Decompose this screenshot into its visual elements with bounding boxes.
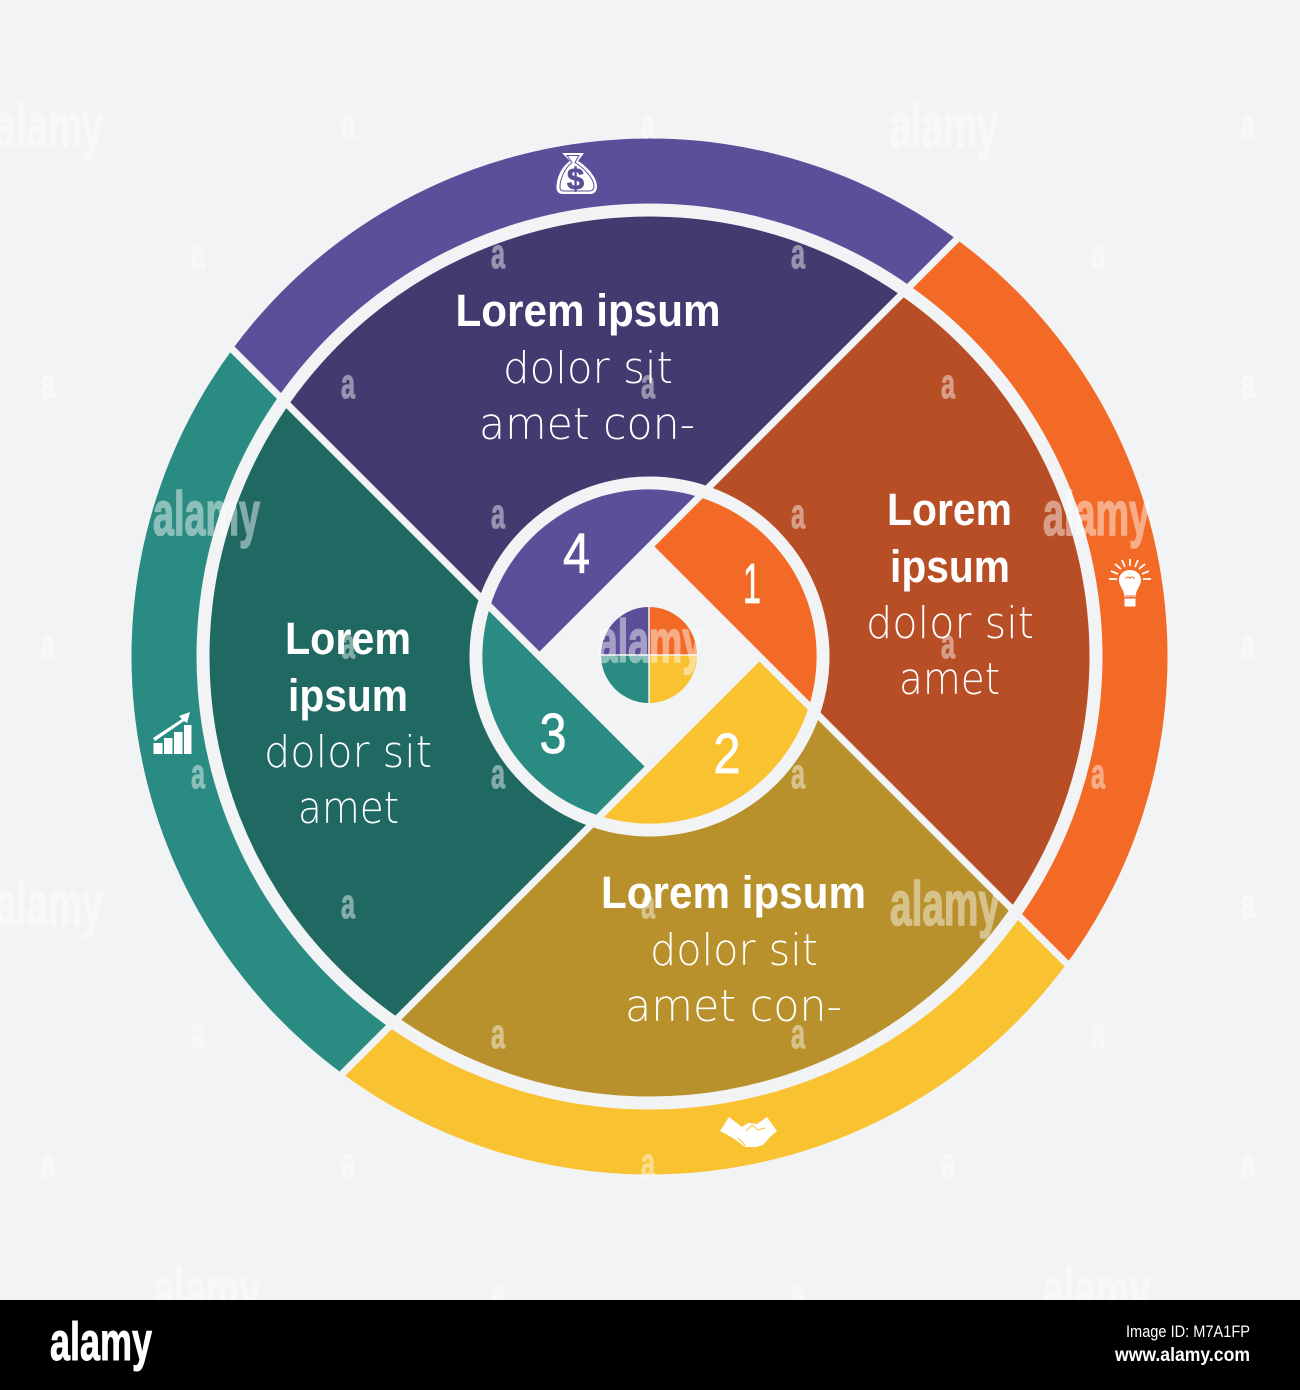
watermark pattern: a [41, 360, 55, 407]
panel: segment 3 teal [131, 349, 650, 1074]
panel: segment 2 yellow [342, 656, 1067, 1175]
watermark pattern: alamy [153, 1257, 260, 1326]
watermark pattern: a [341, 620, 355, 667]
number 3: 3 [540, 702, 566, 766]
watermark pattern: a [941, 620, 955, 667]
watermark pattern: a [791, 1010, 805, 1057]
inner number wedge: yellow [600, 656, 809, 824]
main wedge: rust [709, 295, 1090, 908]
outer ring arc: purple [232, 138, 957, 396]
inner number wedge: teal [482, 607, 650, 816]
watermark pattern: a [191, 750, 205, 797]
watermark pattern: alamy [890, 870, 1000, 939]
main wedge: olive [398, 716, 1011, 1097]
text block: segment 4: amet con- [479, 399, 695, 450]
watermark pattern: a [641, 1139, 655, 1186]
watermark pattern: a [191, 1010, 205, 1057]
main wedge: dark teal [209, 405, 590, 1018]
watermark pattern: alamy [0, 870, 103, 939]
icon: money bag: $ [567, 161, 584, 196]
icon: growth bar chart [153, 712, 192, 754]
main wedge: dark purple [288, 216, 901, 597]
text block: segment 1: dolor sit [866, 598, 1034, 649]
icon: light bulb [1109, 559, 1151, 606]
watermark pattern: a [341, 100, 355, 147]
text block: segment 3: dolor sit [264, 727, 432, 778]
inner number wedge: purple [490, 489, 699, 656]
number 4: 4 [563, 522, 590, 586]
text block: segment 4 [456, 285, 720, 450]
outer ring arc: teal [131, 349, 389, 1074]
inner number wedge: orange [650, 497, 817, 706]
watermark pattern: a [641, 880, 655, 927]
watermark pattern: a [491, 1010, 505, 1057]
panel: segment 1 orange [650, 239, 1168, 964]
footer website: www.alamy.com [1114, 1345, 1250, 1366]
watermark pattern: a [1241, 880, 1255, 927]
text block: segment 1 [866, 484, 1034, 705]
text block: segment 4: dolor sit [503, 343, 673, 394]
text block: segment 2: Lorem ipsum [601, 867, 866, 918]
text block: segment 1: Lorem [887, 484, 1012, 535]
watermark pattern: a [641, 360, 655, 407]
watermark pattern: alamy [1043, 1257, 1150, 1326]
watermark pattern: a [491, 750, 505, 797]
number 2: 2 [714, 722, 740, 786]
text block: segment 3: Lorem [285, 613, 411, 664]
watermark pattern: a [1091, 230, 1105, 277]
watermark pattern: a [1241, 100, 1255, 147]
icon: money bag [556, 153, 597, 196]
number 1: 1 [743, 552, 761, 616]
watermark pattern: a [41, 1139, 55, 1186]
text block: segment 1: ipsum [890, 541, 1010, 592]
text block: segment 2: dolor sit [650, 925, 818, 976]
text block: segment 2: amet con- [625, 981, 842, 1032]
watermark pattern: a [191, 230, 205, 277]
icon: handshake [720, 1117, 777, 1147]
watermark pattern: alamy [890, 92, 998, 161]
watermark pattern: a [341, 1139, 355, 1186]
watermark pattern: a [341, 360, 355, 407]
watermark pattern: a [341, 880, 355, 927]
watermark pattern: a [1241, 1139, 1255, 1186]
watermark pattern: a [1241, 360, 1255, 407]
footer bar [0, 1300, 1300, 1390]
outer ring arc: yellow [342, 917, 1067, 1175]
panel: segment 4 purple [232, 138, 957, 657]
watermark pattern: a [791, 490, 805, 537]
watermark pattern: a [791, 230, 805, 277]
watermark pattern: a [941, 1139, 955, 1186]
watermark pattern: alamy [0, 92, 103, 161]
watermark pattern: alamy [153, 480, 260, 549]
watermark pattern: a [641, 100, 655, 147]
text block: segment 4: Lorem ipsum [456, 285, 720, 336]
text block: segment 1: amet [899, 654, 1000, 705]
watermark pattern: a [791, 1270, 805, 1317]
text block: segment 3 [264, 613, 432, 834]
watermark pattern: a [1091, 1010, 1105, 1057]
watermark pattern: alamy [1043, 480, 1150, 549]
outer ring arc: orange [910, 239, 1168, 964]
text block: segment 3: ipsum [288, 670, 408, 721]
text block: segment 3: amet [298, 783, 399, 834]
watermark pattern: a [41, 620, 55, 667]
watermark pattern: a [941, 360, 955, 407]
watermark pattern: a [791, 750, 805, 797]
watermark pattern: a [491, 1270, 505, 1317]
center mini pie chart [600, 606, 698, 704]
footer image id: Image ID: M7A1FP [1126, 1322, 1250, 1341]
text block: segment 2 [601, 867, 866, 1032]
watermark pattern: a [1091, 750, 1105, 797]
watermark pattern: alamy [597, 608, 703, 675]
watermark pattern: a [491, 490, 505, 537]
watermark pattern: a [1241, 620, 1255, 667]
footer logo: alamy [50, 1312, 152, 1372]
watermark pattern: a [491, 230, 505, 277]
